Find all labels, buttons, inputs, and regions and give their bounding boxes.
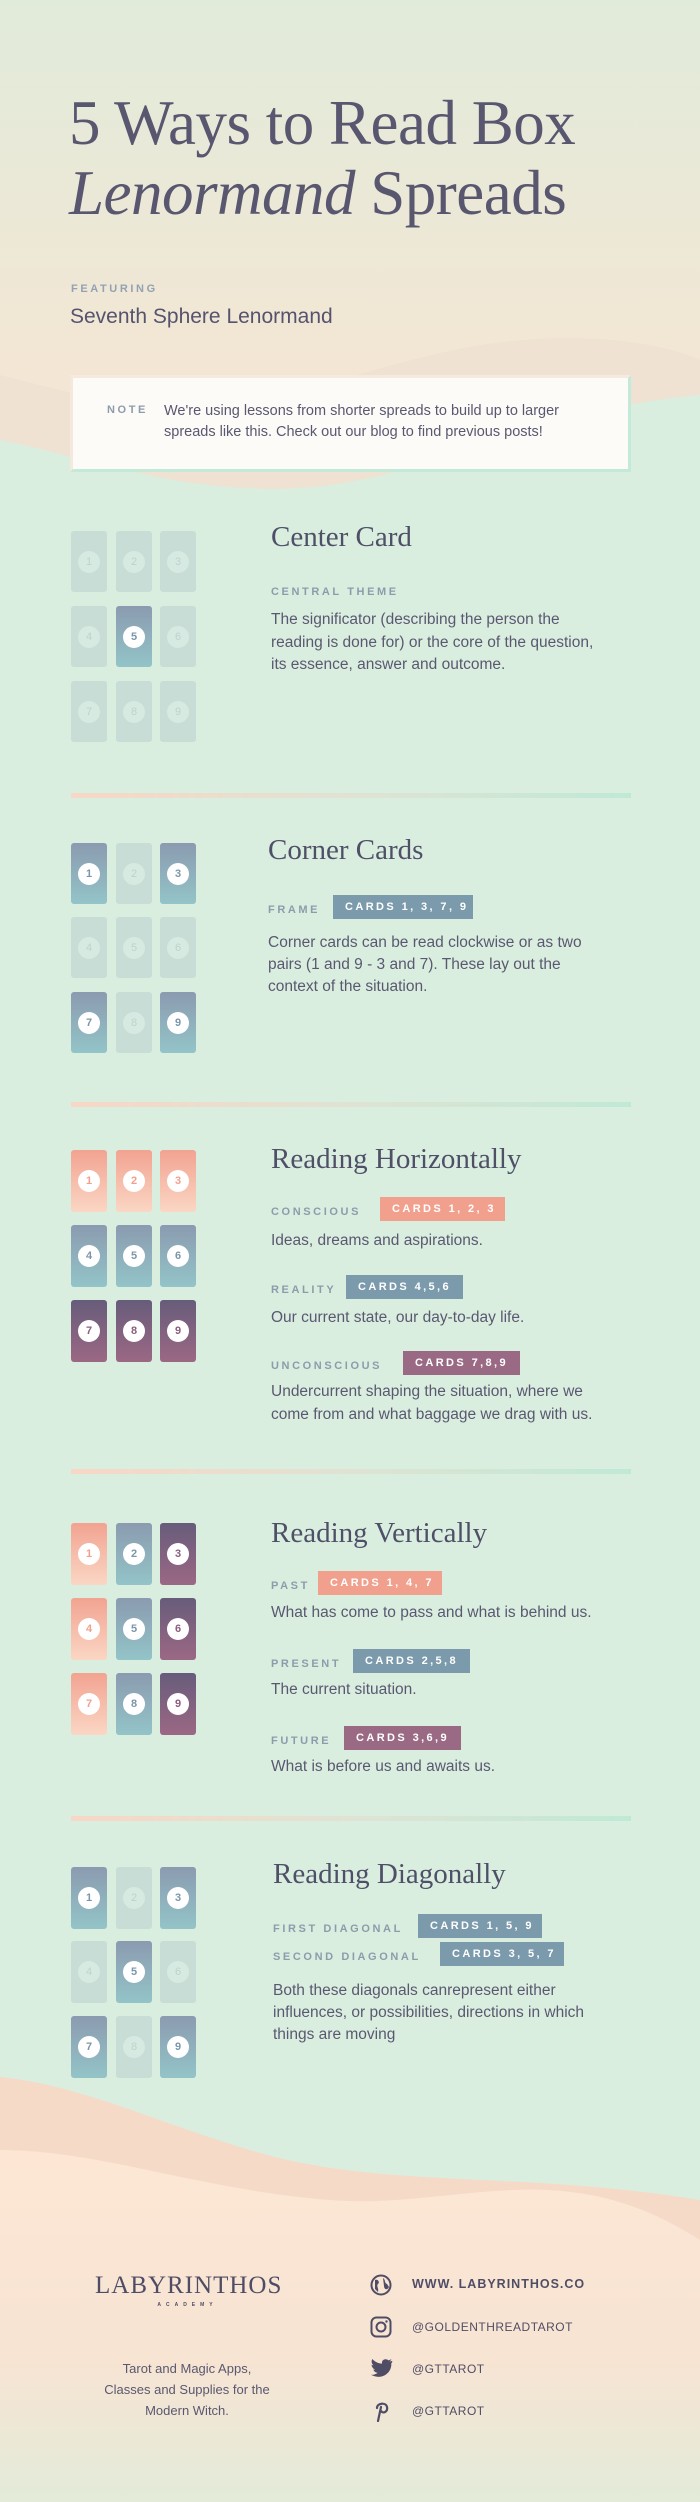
title: Lenormand Spreads <box>69 158 566 228</box>
panel: reading horizontally: come from and what baggage we drag with us. <box>271 1406 592 1423</box>
card grid: 2 <box>131 1892 137 1904</box>
heading: Reading Horizontally <box>271 1143 521 1175</box>
panel: reading vertically: CARDS 1, 4, 7 <box>330 1577 434 1589</box>
card grid: 1 <box>86 1892 92 1904</box>
note text <box>164 403 559 440</box>
card grid: 9 <box>175 1016 181 1028</box>
card grid: 3 <box>175 1548 181 1560</box>
card grid: 8 <box>131 1016 137 1028</box>
card grid: 2 <box>131 556 137 568</box>
card grid: 9 <box>175 706 181 718</box>
footer links: @GTTAROT <box>412 2362 485 2376</box>
card grid: 4 <box>86 1623 92 1635</box>
note label: NOTE <box>107 404 148 416</box>
unconscious: UNCONSCIOUS <box>271 1360 382 1372</box>
card grid: 5 <box>131 942 137 954</box>
note text: spreads like this. Check out our blog to find previous posts! <box>164 424 543 440</box>
card grid: 5 <box>131 630 137 642</box>
future: FUTURE <box>271 1735 331 1747</box>
footer tagline: Modern Witch. <box>145 2403 229 2418</box>
card grid: 1 <box>86 1548 92 1560</box>
panel: corner cards: CARDS 1, 3, 7, 9 <box>345 901 468 913</box>
card grid <box>71 1523 196 1735</box>
heading: Reading Vertically <box>271 1517 487 1549</box>
text: its essence, answer and outcome. <box>271 656 505 673</box>
second diagonal: SECOND DIAGONAL <box>273 1951 421 1963</box>
past: PAST <box>271 1580 310 1592</box>
text <box>271 611 593 673</box>
card grid: 3 <box>175 1892 181 1904</box>
card grid <box>71 1150 196 1362</box>
card grid <box>71 843 196 1053</box>
card grid <box>71 1867 196 2078</box>
card grid: 2 <box>131 1548 137 1560</box>
card grid: 8 <box>131 1698 137 1710</box>
card grid: 5 <box>131 1623 137 1635</box>
card grid: 9 <box>175 1325 181 1337</box>
present: PRESENT <box>271 1658 341 1670</box>
icon: pinterest <box>376 2402 388 2422</box>
first diagonal: FIRST DIAGONAL <box>273 1923 403 1935</box>
footer logo: LABYRINTHOS <box>95 2272 282 2299</box>
note box <box>70 375 631 472</box>
panel: reading horizontally: Ideas, dreams and aspirations. <box>271 1232 483 1249</box>
icon: instagram <box>370 2316 392 2338</box>
footer links: @GTTAROT <box>412 2404 485 2418</box>
panel: reading diagonally: CARDS 3, 5, 7 <box>452 1948 556 1960</box>
text: things are moving <box>273 2026 395 2043</box>
panel: reading vertically: What is before us and awaits us. <box>271 1758 495 1775</box>
text <box>268 934 582 995</box>
panel: reading horizontally: CARDS 4,5,6 <box>358 1281 451 1293</box>
panel: reading horizontally: Our current state, our day-to-day life. <box>271 1309 524 1326</box>
card grid: 4 <box>86 942 92 954</box>
card grid: 4 <box>86 1250 92 1262</box>
panel: reading vertically <box>71 1517 592 1775</box>
card grid: 1 <box>86 556 92 568</box>
card grid: 9 <box>175 1698 181 1710</box>
card grid: 1 <box>86 1175 92 1187</box>
footer links: WWW. LABYRINTHOS.CO <box>412 2277 585 2291</box>
icon: globe <box>370 2274 392 2296</box>
card grid: 6 <box>175 1250 181 1262</box>
text: reading is done for) or the core of the question, <box>271 634 593 650</box>
text: Both these diagonals canrepresent either <box>273 1982 556 1999</box>
card grid: 9 <box>175 2041 181 2053</box>
card grid: 4 <box>86 630 92 642</box>
card grid: 6 <box>175 630 181 642</box>
card grid: 7 <box>86 706 92 718</box>
panel: reading vertically: CARDS 2,5,8 <box>365 1655 458 1667</box>
card grid: 8 <box>131 1325 137 1337</box>
card grid: 4 <box>86 1966 92 1978</box>
icon: twitter <box>371 2359 392 2377</box>
card grid: 7 <box>86 1325 92 1337</box>
footer tagline: Tarot and Magic Apps, <box>123 2361 251 2376</box>
card grid: 5 <box>131 1966 137 1978</box>
footer tagline <box>104 2361 270 2418</box>
heading: Center Card <box>271 521 412 553</box>
panel: reading horizontally <box>71 1143 592 1423</box>
footer links: @GOLDENTHREADTAROT <box>412 2320 573 2334</box>
label: CENTRAL THEME <box>271 586 399 598</box>
note text: We're using lessons from shorter spreads to build up to larger <box>164 403 559 419</box>
footer tagline: Classes and Supplies for the <box>104 2382 270 2397</box>
panel: reading horizontally: CARDS 7,8,9 <box>415 1357 508 1369</box>
reality: REALITY <box>271 1284 336 1296</box>
panel: corner cards <box>71 834 582 1053</box>
card grid: 6 <box>175 942 181 954</box>
label + badge: FRAME <box>268 904 320 916</box>
card grid: 5 <box>131 1250 137 1262</box>
heading: Corner Cards <box>268 834 423 866</box>
panel: reading vertically: The current situation. <box>271 1681 417 1698</box>
panel: center card <box>71 521 593 742</box>
card grid: 2 <box>131 868 137 880</box>
card grid: 3 <box>175 556 181 568</box>
text <box>273 1982 584 2043</box>
card grid: 8 <box>131 706 137 718</box>
panel: reading vertically: CARDS 3,6,9 <box>356 1732 449 1744</box>
card grid: 2 <box>131 1175 137 1187</box>
text: pairs (1 and 9 - 3 and 7). These lay out the <box>268 956 561 973</box>
conscious: CONSCIOUS <box>271 1206 361 1218</box>
text: The significator (describing the person the <box>271 611 560 628</box>
card grid: 7 <box>86 1016 92 1028</box>
deck name: Seventh Sphere Lenormand <box>70 305 333 328</box>
footer logo: ACADEMY <box>157 2302 218 2308</box>
footer links <box>370 2274 585 2422</box>
featuring label: FEATURING <box>71 283 158 295</box>
card grid: 7 <box>86 2041 92 2053</box>
text: context of the situation. <box>268 978 427 995</box>
card grid: 1 <box>86 868 92 880</box>
text: influences, or possibilities, directions in which <box>273 2004 584 2021</box>
card grid: 8 <box>131 2041 137 2053</box>
card grid: 7 <box>86 1698 92 1710</box>
panel: reading horizontally: Undercurrent shaping the situation, where we <box>271 1383 583 1400</box>
card grid: 3 <box>175 1175 181 1187</box>
card grid: 3 <box>175 868 181 880</box>
card grid: 6 <box>175 1623 181 1635</box>
text: Corner cards can be read clockwise or as two <box>268 934 582 951</box>
panel: reading diagonally: CARDS 1, 5, 9 <box>430 1920 534 1932</box>
title: 5 Ways to Read Box <box>69 88 575 158</box>
card grid: 6 <box>175 1966 181 1978</box>
heading: Reading Diagonally <box>273 1858 506 1890</box>
card grid <box>71 531 196 742</box>
panel: reading diagonally <box>71 1858 584 2078</box>
panel: reading horizontally: CARDS 1, 2, 3 <box>392 1203 496 1215</box>
panel: reading vertically: What has come to pass and what is behind us. <box>271 1604 592 1621</box>
title <box>68 88 575 228</box>
